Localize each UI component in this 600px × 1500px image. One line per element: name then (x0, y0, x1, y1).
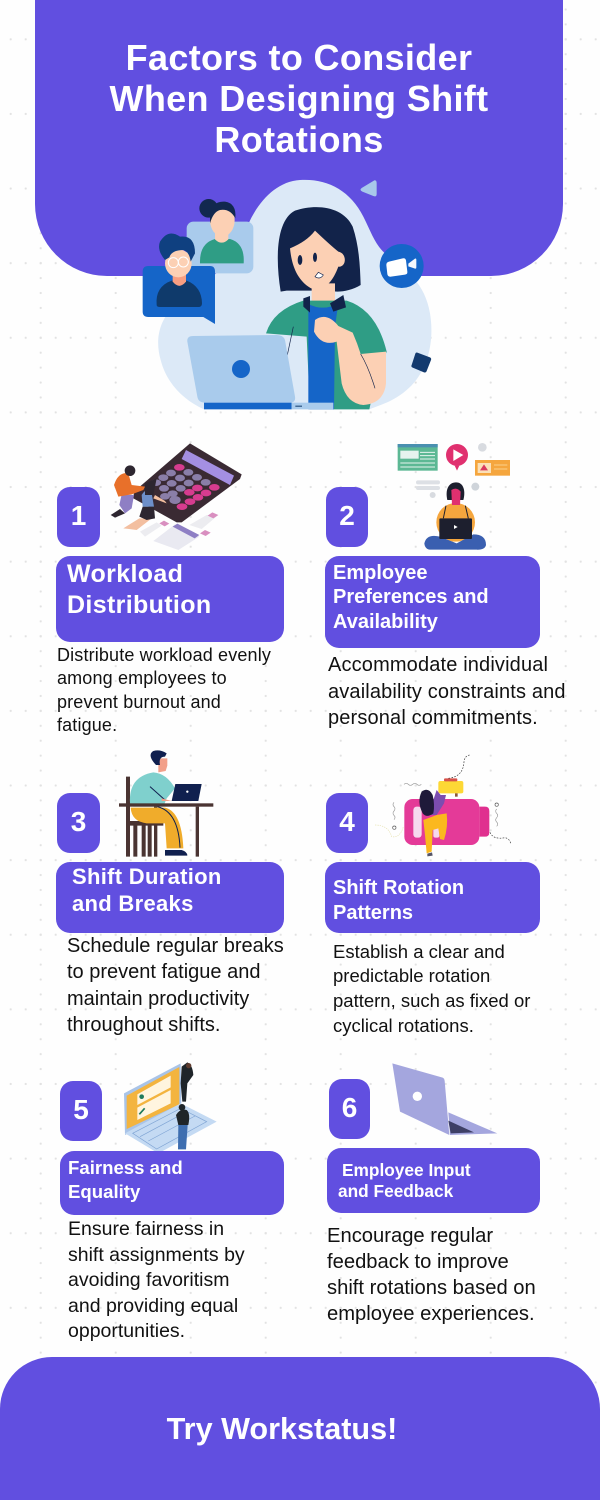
heading (327, 1148, 540, 1213)
text block: shift assignments by (68, 1244, 245, 1266)
number badge 3: 3 (71, 806, 86, 837)
text block: Accommodate individual (328, 654, 548, 676)
text block: predictable rotation (333, 965, 490, 986)
text block: Distribute workload evenly (57, 645, 271, 665)
text block: pattern, such as fixed or (333, 990, 530, 1011)
number badge 2: 2 (339, 500, 355, 531)
text block (57, 645, 271, 735)
text block (333, 940, 530, 1036)
footer panel (0, 1357, 600, 1500)
heading: Workload (67, 560, 183, 588)
heading (60, 1151, 284, 1215)
heading: Equality (68, 1181, 140, 1202)
text block: maintain productivity (67, 988, 249, 1010)
heading: Distribution (67, 591, 211, 619)
text block: Establish a clear and (333, 940, 505, 962)
text block: Schedule regular breaks (67, 935, 284, 957)
number badge 3 (57, 793, 100, 853)
title: When Designing Shift (110, 78, 488, 119)
panel: employee preferences and availability (325, 443, 566, 729)
number badge 4 (326, 793, 368, 853)
heading (325, 556, 540, 648)
number badge 1 (57, 487, 100, 547)
text block (67, 935, 284, 1036)
text block (327, 1225, 536, 1325)
icon: woman with laptop and media windows (398, 443, 510, 550)
text block: to prevent fatigue and (67, 961, 260, 983)
icon: people on a calculator (110, 443, 242, 550)
number badge 4: 4 (339, 806, 355, 837)
heading: Employee (333, 562, 427, 584)
number badge 6 (329, 1079, 370, 1139)
text block (328, 654, 566, 729)
panel: fairness and equality (60, 1062, 284, 1342)
text block: fatigue. (57, 715, 117, 735)
text block: availability constraints and (328, 680, 566, 702)
title: Factors to Consider (126, 37, 472, 78)
heading: Fairness and (68, 1157, 183, 1178)
heading: Employee Input (342, 1160, 471, 1180)
title: Rotations (214, 119, 384, 160)
heading (56, 556, 284, 642)
heading (56, 862, 284, 933)
text block: Ensure fairness in (68, 1218, 224, 1240)
icon: open laptop (392, 1064, 498, 1135)
number badge 5: 5 (73, 1094, 89, 1125)
text block: throughout shifts. (67, 1014, 220, 1036)
text block: opportunities. (68, 1320, 185, 1342)
icon: woman climbing a battery (375, 754, 511, 856)
text block: avoiding favoritism (68, 1269, 229, 1291)
icon: man working at desk (119, 750, 214, 857)
number badge 6: 6 (342, 1092, 357, 1123)
heading (325, 862, 540, 933)
text block: shift rotations based on (327, 1277, 536, 1299)
heading: Preferences and (333, 586, 489, 608)
heading: Shift Rotation (333, 876, 464, 898)
panel: workload distribution (56, 443, 284, 735)
heading: and Feedback (338, 1180, 453, 1200)
heading: Shift Duration (72, 864, 222, 888)
call to action: Try Workstatus! (167, 1412, 397, 1446)
panel: employee input and feedback (327, 1064, 540, 1325)
header panel (35, 0, 563, 276)
text block: and providing equal (68, 1294, 238, 1316)
text block: personal commitments. (328, 707, 538, 729)
heading: Availability (333, 610, 438, 632)
heading: Patterns (333, 902, 413, 924)
number badge 2 (326, 487, 368, 547)
number badge 1: 1 (71, 500, 86, 531)
text block: feedback to improve (327, 1251, 509, 1273)
number badge 5 (60, 1081, 102, 1141)
icon: people and a giant laptop (124, 1062, 216, 1151)
panel: shift duration and breaks (56, 750, 284, 1036)
text block (68, 1218, 245, 1342)
illustration: woman on a video call with laptop (142, 180, 432, 410)
text block: Encourage regular (327, 1225, 493, 1247)
panel: shift rotation patterns (325, 754, 540, 1036)
text block: prevent burnout and (57, 692, 221, 712)
heading: and Breaks (72, 890, 194, 916)
text block: employee experiences. (327, 1303, 535, 1325)
title (110, 37, 488, 160)
text block: cyclical rotations. (333, 1015, 474, 1036)
text block: among employees to (57, 668, 227, 688)
